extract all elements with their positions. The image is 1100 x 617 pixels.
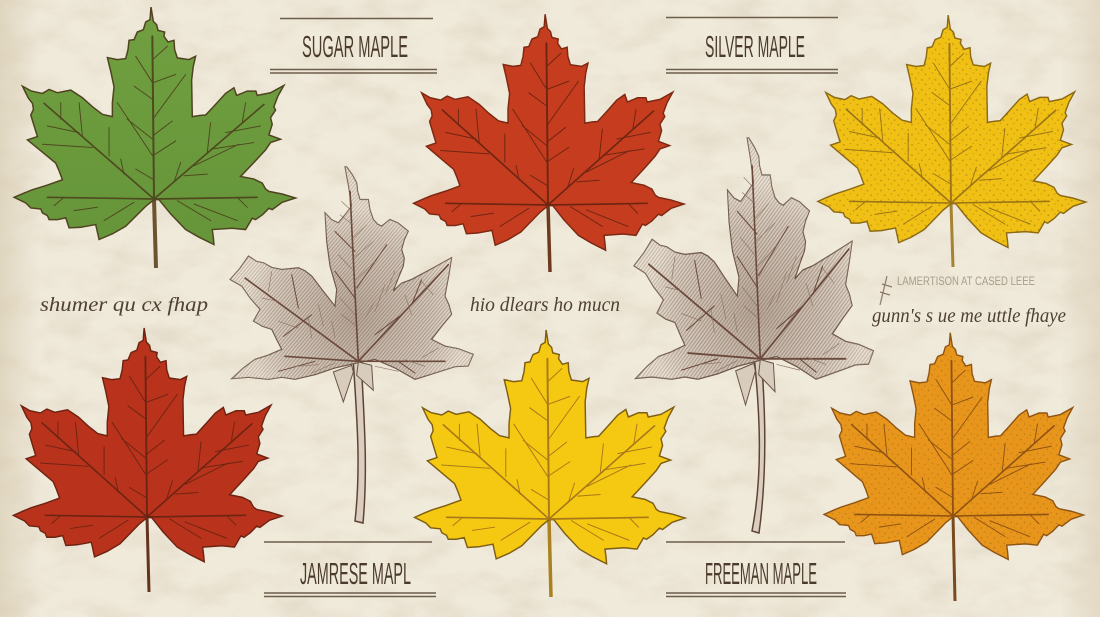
stem <box>951 203 953 267</box>
stem <box>353 358 365 523</box>
blade <box>634 138 873 405</box>
script caption: centre: hio dlears ho mucn <box>470 294 620 316</box>
blade <box>824 333 1083 559</box>
label: japanese maple <box>264 542 436 596</box>
stem <box>549 519 551 597</box>
leaf: green sugar maple <box>14 7 296 268</box>
label: silver maple: SILVER MAPLE <box>705 29 805 64</box>
blade <box>818 15 1086 248</box>
label: sugar maple <box>270 18 437 73</box>
stem <box>953 516 955 601</box>
blade <box>230 167 473 402</box>
leaf: orange bottom right <box>824 333 1083 601</box>
stipules <box>736 360 775 405</box>
stem <box>147 517 149 592</box>
icon: small pen flourish <box>880 276 892 305</box>
blade <box>414 14 684 250</box>
label: japanese maple: JAMRESE MAPL <box>300 556 411 591</box>
leaf: yellow top right <box>818 15 1086 267</box>
stem <box>752 355 765 533</box>
sketch leaf: left <box>230 167 473 523</box>
label: sugar maple: SUGAR MAPLE <box>302 29 408 64</box>
leaf: red bottom left <box>13 328 282 592</box>
label: freeman maple <box>666 542 846 596</box>
label: silver maple <box>666 18 838 73</box>
script caption: right: gunn's s ue me uttle fhaye <box>872 305 1066 327</box>
blade <box>415 330 685 564</box>
sketch leaf: right <box>634 138 873 533</box>
leaf: red centre top <box>414 14 684 272</box>
leaf: yellow bottom centre <box>415 330 685 597</box>
stem <box>154 199 156 268</box>
small faded caption: LAMERTISON AT CASED LEEE <box>897 274 1035 288</box>
blade <box>13 328 282 562</box>
blade <box>14 7 296 244</box>
script caption: left: shumer qu cx fhap <box>40 294 208 316</box>
stipules <box>333 362 373 402</box>
label: freeman maple: FREEMAN MAPLE <box>705 556 817 591</box>
stem <box>548 205 550 272</box>
